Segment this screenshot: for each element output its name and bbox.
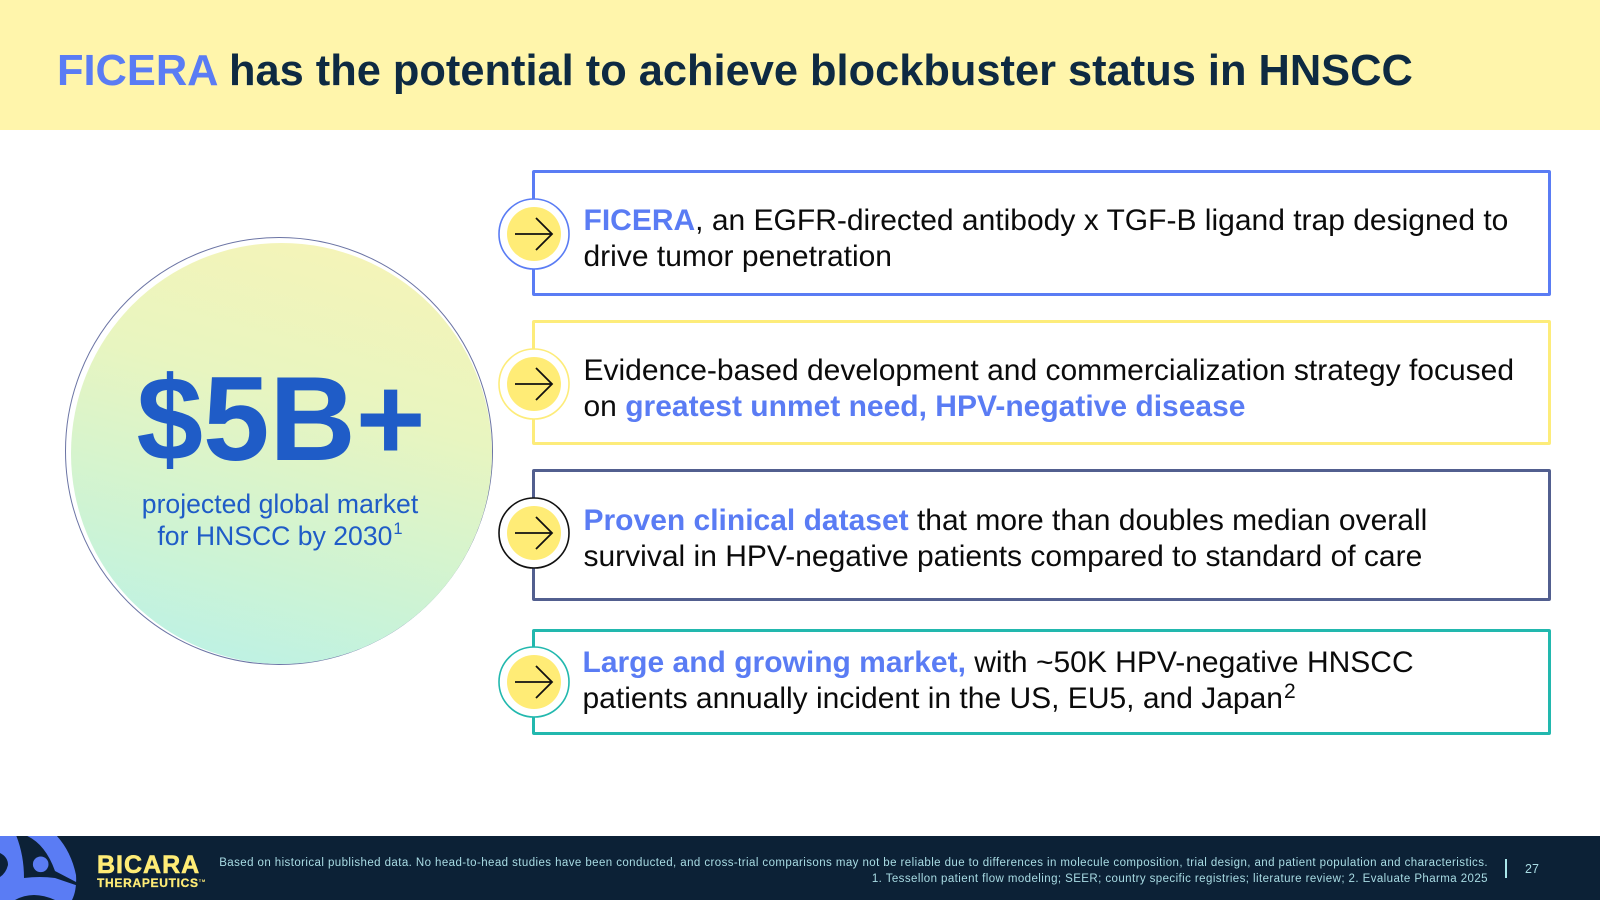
card 4 text — [582, 646, 1414, 715]
card 1 text: FICERA, an EGFR-directed antibody x TGF-B ligand trap designed to — [584, 204, 1508, 237]
card 3 text: Proven clinical dataset that more than doubles median overall — [584, 504, 1427, 537]
footnote: Based on historical published data. No head-to-head studies have been conducted, and cross-trial comparisons may not be reliable due to differences in molecule composition, trial design, and patient population and characteristics. — [219, 857, 1488, 869]
panel: card 4 — [532, 629, 1551, 735]
panel: card 2 — [532, 320, 1551, 445]
circle caption — [142, 489, 418, 550]
icon: arrow 1 — [498, 198, 570, 270]
card 1 text — [584, 204, 1508, 273]
card 4 text: Large and growing market, with ~50K HPV-negative HNSCC — [582, 646, 1414, 679]
circle outline — [65, 237, 493, 665]
logo wordmark: BICARA — [97, 851, 200, 879]
page divider — [1505, 859, 1507, 878]
icon: arrow 4 — [498, 646, 570, 718]
panel: card 3 — [532, 469, 1551, 601]
logo wordmark — [97, 851, 206, 890]
header band — [0, 0, 1600, 130]
card 1 text: drive tumor penetration — [584, 240, 892, 273]
gradient disc — [71, 243, 492, 664]
icon: arrow 3 — [498, 497, 570, 569]
logo wordmark: THERAPEUTICSTM — [97, 876, 206, 890]
icon: arrow 2 — [498, 348, 570, 420]
big number: $5B+ — [136, 353, 426, 486]
icon: Bicara logo mark — [0, 836, 76, 900]
title: FICERA has the potential to achieve blockbuster status in HNSCC — [57, 47, 1413, 95]
card 2 text: Evidence-based development and commercialization strategy focused — [584, 354, 1514, 387]
circle caption: projected global market — [142, 489, 418, 519]
card 3 text — [584, 504, 1427, 573]
card 4 text: patients annually incident in the US, EU5, and Japan2 — [582, 680, 1296, 715]
circle caption: for HNSCC by 20301 — [157, 520, 403, 550]
footer band — [0, 836, 1600, 900]
page number: 27 — [1525, 862, 1539, 876]
panel: market size circle — [65, 237, 493, 665]
panel: card 1 — [532, 170, 1551, 296]
footnote: 1. Tessellon patient flow modeling; SEER; country specific registries; literature review; 2. Evaluate Pharma 2025 — [872, 873, 1488, 885]
card 3 text: survival in HPV-negative patients compared to standard of care — [584, 540, 1422, 573]
footnote — [219, 857, 1488, 885]
card 2 text: on greatest unmet need, HPV-negative disease — [584, 390, 1245, 423]
card 2 text — [584, 354, 1514, 423]
